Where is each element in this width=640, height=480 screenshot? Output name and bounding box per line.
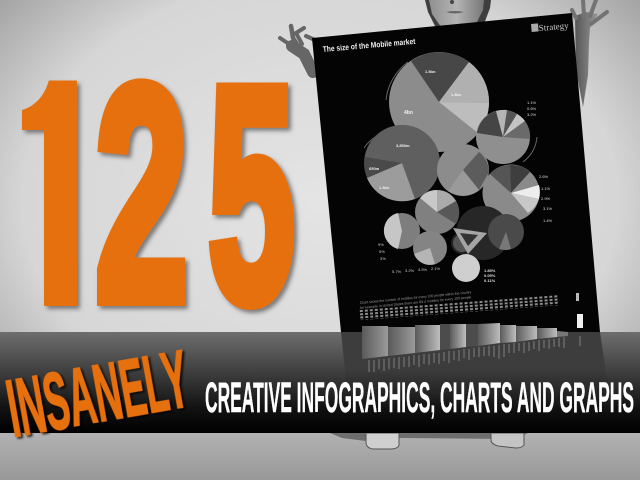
country columns: [361, 295, 556, 320]
small pie labels: 9%: [378, 242, 384, 247]
pie chart: [364, 125, 440, 201]
poster seen through banner: [341, 323, 610, 400]
large pie chart: [389, 52, 489, 152]
pie chart: 0.6%: [527, 106, 537, 111]
floor shadow: [330, 433, 528, 441]
light pie chart: 0.05%: [484, 273, 496, 278]
pie chart: 1.3bn: [379, 185, 390, 190]
right hand and arm: [572, 0, 607, 107]
digit 1: 1: [7, 22, 105, 364]
small pie labels: 3%: [380, 256, 386, 261]
small pie labels: [378, 242, 441, 274]
large pie chart: 4bn: [404, 110, 413, 116]
pie chart: 3.2%: [527, 112, 537, 117]
poster title: The size of the Mobile market: [322, 37, 416, 54]
digit 5: 5: [208, 23, 295, 365]
bar chart: [362, 323, 568, 359]
pie chart: 1.4%: [543, 218, 553, 223]
poster body text: Chart shows the number of mobiles for every 100 people within the country: [360, 290, 472, 305]
lower value columns: [369, 336, 580, 372]
poster: [312, 13, 600, 332]
small pie labels: 3.2%: [405, 268, 415, 273]
white reference bar: [577, 314, 583, 328]
small pie labels: 2.1%: [431, 266, 441, 271]
poster body text: for example in United States there are 89.4 mobiles for every 100 people: [360, 295, 472, 310]
pie chart: 1.1%: [527, 100, 537, 105]
head: [425, 0, 491, 28]
left shoe: [366, 433, 399, 449]
pie chart: 2.9%: [541, 196, 551, 201]
large pie chart: 1.8bn: [451, 92, 462, 97]
pie chart: [482, 164, 553, 223]
pie chart: 3.1%: [543, 206, 553, 211]
pie chart: 3,850m: [396, 143, 410, 148]
person holding the poster: [280, 0, 607, 449]
pie chart: 1.1%: [541, 186, 551, 191]
pie chart: 2.6%: [539, 174, 549, 179]
pie chart: [437, 144, 489, 196]
big number 125: [22, 78, 300, 316]
pie chart: [384, 213, 420, 249]
large pie chart: 1.5bn: [425, 69, 436, 74]
slide: INSANELY: [0, 334, 195, 455]
top marker: [576, 293, 579, 301]
small pie labels: 5.7%: [392, 269, 402, 274]
pie chart: [413, 231, 447, 265]
digit 2: 2: [95, 22, 188, 364]
black banner: [0, 332, 640, 433]
light pie chart: [452, 254, 496, 283]
Strategy logo: Strategy: [538, 20, 570, 33]
pie chart: 650m: [369, 166, 380, 171]
dark pie charts: [452, 206, 524, 260]
floor: [0, 433, 640, 480]
pie chart: [415, 190, 459, 234]
small pie labels: 5%: [379, 249, 385, 254]
light pie chart: 1.85%: [484, 268, 496, 273]
pie ring arcs: [364, 62, 537, 162]
small pie labels: 4.5%: [418, 267, 428, 272]
pie chart: [476, 100, 537, 164]
light pie chart: 0.11%: [484, 278, 496, 283]
right shoe: [491, 433, 524, 448]
left hand: [280, 26, 315, 72]
